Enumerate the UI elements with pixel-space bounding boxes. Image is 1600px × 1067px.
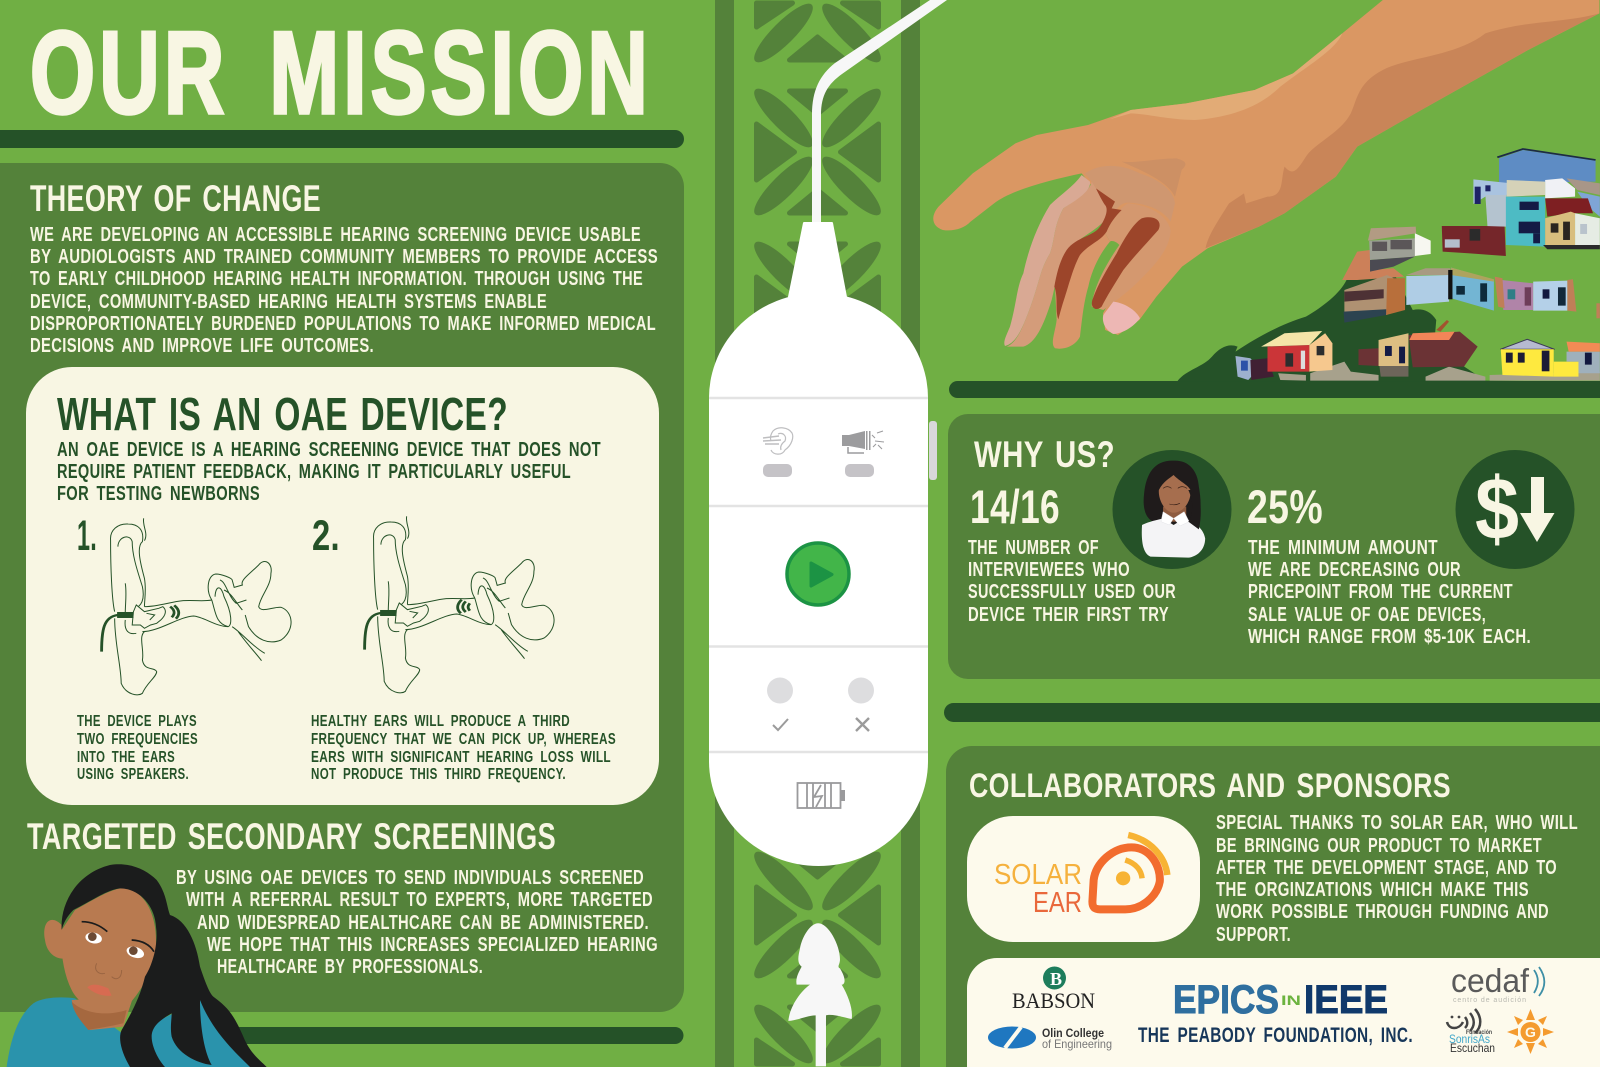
illustration: hillside houses (1178, 149, 1600, 382)
centre patterned band (715, 0, 920, 1067)
logo: cedaf: centro de audición (1453, 997, 1526, 1004)
text block: thanks: SUPPORT. (1216, 924, 1291, 946)
logo: Fundación Sonrisas que Escuchan (1447, 1009, 1495, 1055)
play button (787, 543, 849, 605)
logo: Fundación Sonrisas que Escuchan: Fundación (1466, 1030, 1492, 1036)
text block: step 2 caption: EARS WITH SIGNIFICANT HEARING LOSS WILL (311, 749, 611, 766)
text block: step 1 caption: THE DEVICE PLAYS (77, 713, 197, 730)
heading: targeted secondary screenings: TARGETED SECONDARY SCREENINGS (27, 816, 556, 857)
icon: cross (856, 718, 869, 731)
text block: OAE definition: AN OAE DEVICE IS A HEARING SCREENING DEVICE THAT DOES NOT (57, 439, 601, 461)
text block: theory of change: DECISIONS AND IMPROVE LIFE OUTCOMES. (30, 335, 374, 357)
step number 1: 1. (77, 512, 97, 560)
text block: targeted secondary screenings: WITH A REFERRAL RESULT TO EXPERTS, MORE TARGETED (186, 889, 653, 911)
text block: 25% description: WE ARE DECREASING OUR (1248, 559, 1461, 581)
lower houses (1235, 320, 1600, 380)
text block: step 2 caption: FREQUENCY THAT WE CAN PICK UP, WHEREAS (311, 731, 616, 748)
text block: theory of change: WE ARE DEVELOPING AN ACCESSIBLE HEARING SCREENING DEVICE USABLE (30, 224, 641, 246)
logo: Babson: B (1050, 969, 1062, 989)
step number 2: 2. (312, 512, 340, 560)
illustration: reaching hand (933, 0, 1599, 349)
text block: theory of change (30, 224, 658, 357)
panel: collaborators and sponsors (946, 746, 1600, 1067)
text block: step 2 caption: HEALTHY EARS WILL PRODUCE A THIRD (311, 713, 570, 730)
logo: cedaf: cedaf (1451, 962, 1530, 999)
heading: why us: WHY US? (974, 434, 1115, 475)
text block: theory of change: BY AUDIOLOGISTS AND TRAINED COMMUNITY MEMBERS TO PROVIDE ACCESS (30, 246, 658, 268)
text block: step 1 caption: TWO FREQUENCIES (77, 731, 198, 748)
logo: EPICS in IEEE: IN (1281, 992, 1301, 1008)
upper houses (1442, 149, 1600, 256)
text block: step 1 caption (77, 713, 198, 783)
logo: Olin College: Olin College (1042, 1026, 1104, 1040)
text: Peabody Foundation: THE PEABODY FOUNDATION, INC. (1138, 1024, 1413, 1047)
heading: theory of change: THEORY OF CHANGE (30, 178, 321, 219)
logo: Olin College: of Engineering (1042, 1037, 1112, 1051)
text block: OAE definition (57, 439, 601, 505)
right bar under hand (949, 381, 1600, 398)
logo: EPICS in IEEE: EPICS (1173, 978, 1279, 1022)
illustration: woman looking up (7, 864, 267, 1067)
icon: price down: $ (1475, 459, 1519, 558)
logo: solar ear: SOLAR (994, 859, 1082, 891)
logo: solar ear (967, 816, 1200, 942)
panel: why us (948, 414, 1600, 679)
text block: targeted secondary screenings: WE HOPE THAT THIS INCREASES SPECIALIZED HEARING (207, 934, 658, 956)
logo: Fundación Sonrisas que Escuchan: Escuchan (1450, 1041, 1495, 1055)
middle houses (1342, 227, 1600, 323)
icon: megaphone (842, 431, 884, 453)
bottom left bar (200, 1027, 684, 1044)
logo: solar ear: EAR (1033, 887, 1082, 919)
title: OUR MISSION (30, 7, 652, 138)
heading: collaborators and sponsors: COLLABORATORS AND SPONSORS (969, 767, 1451, 805)
ear diagram 2 (365, 516, 554, 693)
icon: interviewee portrait (1112, 450, 1232, 569)
text block: step 1 caption: INTO THE EARS (77, 749, 175, 766)
text block: 25% description: SALE VALUE OF OAE DEVICES, (1248, 604, 1486, 626)
text block: 25% description: PRICEPOINT FROM THE CURRENT (1248, 581, 1513, 603)
heading: what is an OAE device: WHAT IS AN OAE DEVICE? (57, 388, 508, 440)
text block: OAE definition: FOR TESTING NEWBORNS (57, 483, 260, 505)
panel: left column (0, 163, 684, 1012)
text block: targeted secondary screenings: AND WIDESPREAD HEALTHCARE CAN BE ADMINISTERED. (197, 912, 649, 934)
text block: 14/16 description: INTERVIEWEES WHO (968, 559, 1130, 581)
text block: step 2 caption (311, 713, 616, 783)
logo: sun (1507, 1009, 1554, 1054)
indicator pills (763, 464, 874, 477)
title underline bar (0, 130, 684, 148)
text block: 25% description (1248, 537, 1531, 648)
text block: theory of change: DISPROPORTIONATELY BURDENED POPULATIONS TO MAKE INFORMED MEDICAL (30, 313, 656, 335)
text block: 25% description: THE MINIMUM AMOUNT (1248, 537, 1438, 559)
logo: Olin College (988, 1026, 1112, 1051)
panel: sponsor logos (967, 958, 1600, 1067)
logo: Babson (1012, 966, 1095, 1013)
icon: price down (1456, 450, 1574, 569)
fingers (1004, 158, 1185, 349)
logo: Fundación Sonrisas que Escuchan: SonrisAs (1449, 1032, 1490, 1046)
icon: ear (763, 428, 793, 454)
device cable (812, 0, 947, 228)
right middle bar (944, 703, 1600, 722)
logo: sun: G (1525, 1024, 1536, 1040)
icon: check (773, 719, 788, 730)
text block: 14/16 description: THE NUMBER OF (968, 537, 1099, 559)
ear diagram 1 (102, 518, 291, 695)
text block: targeted secondary screenings: HEALTHCARE BY PROFESSIONALS. (217, 956, 483, 978)
text block: 14/16 description: SUCCESSFULLY USED OUR (968, 581, 1176, 603)
logo: EPICS in IEEE (1173, 978, 1388, 1022)
panel: what is an OAE device (26, 367, 659, 805)
text block: theory of change: DEVICE, COMMUNITY-BASED HEARING HEALTH SYSTEMS ENABLE (30, 291, 547, 313)
side button (929, 421, 937, 480)
stat: 14/16: 14/16 (970, 480, 1060, 533)
status lights (767, 678, 874, 704)
text block: 14/16 description (968, 537, 1176, 626)
text block: targeted secondary screenings (176, 867, 658, 978)
text block: 14/16 description: DEVICE THEIR FIRST TRY (968, 604, 1169, 626)
text block: step 1 caption: USING SPEAKERS. (77, 766, 189, 783)
logo: EPICS in IEEE: IEEE (1304, 978, 1388, 1022)
text block: step 2 caption: NOT PRODUCE THIS THIRD FREQUENCY. (311, 766, 566, 783)
OAE device (709, 223, 937, 866)
text block: OAE definition: REQUIRE PATIENT FEEDBACK, MAKING IT PARTICULARLY USEFUL (57, 461, 571, 483)
text block: theory of change: TO EARLY CHILDHOOD HEARING HEALTH INFORMATION. THROUGH USING THE (30, 268, 643, 290)
logo: Babson: BABSON (1012, 988, 1095, 1013)
text block: targeted secondary screenings: BY USING OAE DEVICES TO SEND INDIVIDUALS SCREENED (176, 867, 644, 889)
text block: thanks (1216, 812, 1578, 946)
bottom plug connector (788, 923, 852, 1066)
icon: battery (798, 783, 845, 808)
stat: 25%: 25% (1247, 480, 1323, 533)
